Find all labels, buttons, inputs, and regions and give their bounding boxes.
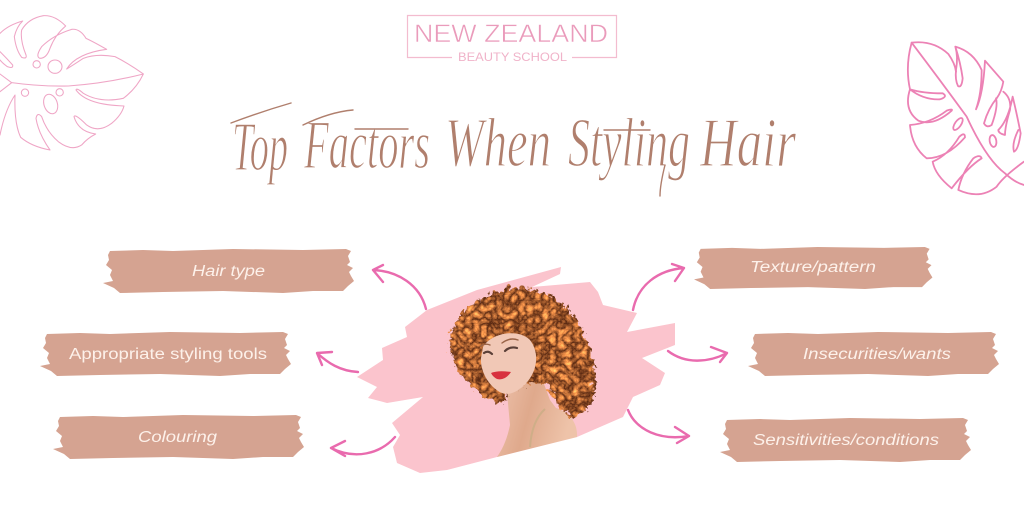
label: Insecurities/wants xyxy=(748,332,999,376)
label: Hair type xyxy=(103,249,354,293)
title: Top xyxy=(232,109,288,186)
neck and shoulder xyxy=(497,368,577,457)
face xyxy=(481,333,536,394)
label: Appropriate styling tools: Appropriate styling tools xyxy=(69,346,267,363)
label: Hair type: Hair type xyxy=(192,263,265,280)
eyes xyxy=(484,347,517,354)
logo: New Zealand Beauty School xyxy=(408,16,616,64)
title: Factors xyxy=(303,107,430,184)
label: Colouring xyxy=(53,415,304,459)
arrow: to Colouring xyxy=(331,437,395,456)
label: Texture/pattern xyxy=(694,247,932,289)
label: Appropriate styling tools xyxy=(40,332,291,376)
arrow: to Insecurities/wants xyxy=(668,347,727,362)
label: Sensitivities/conditions xyxy=(720,418,971,462)
title xyxy=(231,103,797,196)
title: When xyxy=(445,105,551,182)
label: Insecurities/wants: Insecurities/wants xyxy=(803,346,951,363)
icon: monstera leaf top right xyxy=(908,42,1024,194)
logo: New Zealand Beauty School: NEW ZEALAND xyxy=(414,20,608,48)
curly hair xyxy=(447,286,593,415)
dress strap xyxy=(530,409,545,447)
title: Hair xyxy=(699,105,797,182)
label: Colouring: Colouring xyxy=(138,429,217,446)
icon: monstera leaf top left xyxy=(0,16,143,150)
lips xyxy=(491,371,511,379)
title swashes xyxy=(231,103,665,196)
label: Sensitivities/conditions: Sensitivities/conditions xyxy=(753,432,939,449)
pink brush stroke background xyxy=(357,267,675,473)
arrow: to Appropriate styling tools xyxy=(317,352,358,372)
logo: New Zealand Beauty School: BEAUTY SCHOOL xyxy=(458,50,567,64)
arrow: to Hair type xyxy=(373,265,426,309)
arrow: to Texture/pattern xyxy=(633,264,684,310)
title: Styling xyxy=(568,105,690,182)
portrait: woman with curly hair xyxy=(447,286,593,457)
brows xyxy=(481,339,518,346)
arrow: to Sensitivities/conditions xyxy=(628,410,689,443)
label: Texture/pattern: Texture/pattern xyxy=(750,259,876,276)
